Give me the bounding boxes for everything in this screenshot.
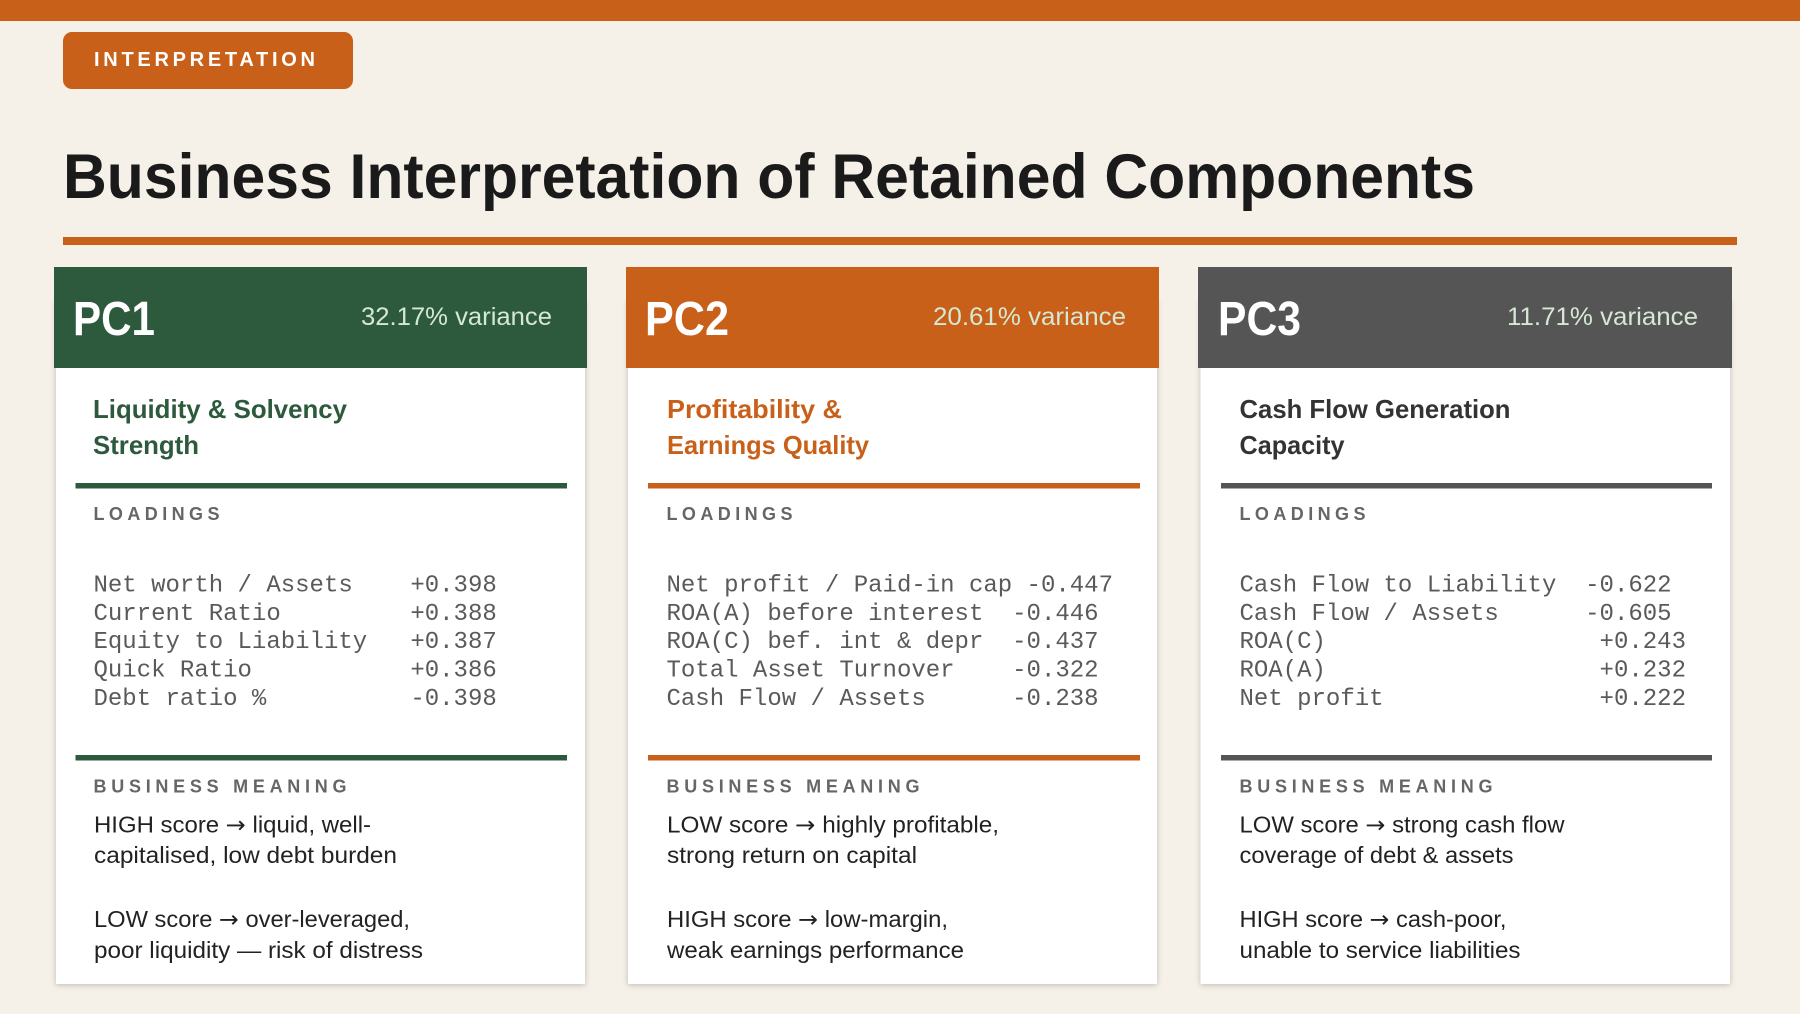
component name — [667, 394, 870, 460]
component name — [93, 394, 348, 460]
business meaning label: BUSINESS MEANING — [1240, 776, 1492, 796]
business meaning label: BUSINESS MEANING — [94, 776, 346, 796]
loadings table: Current Ratio +0.388 — [94, 601, 497, 628]
business meaning text: weak earnings performance — [666, 937, 964, 963]
card header: 20.61% variance — [933, 303, 1126, 331]
card header — [54, 267, 587, 368]
card header: PC3 — [1218, 293, 1301, 346]
loadings table: Net profit / Paid-in cap -0.447 — [666, 572, 1113, 600]
card body — [1200, 300, 1730, 984]
component name — [1240, 394, 1510, 460]
card header: 11.71% variance — [1507, 303, 1698, 331]
loadings table: Equity to Liability +0.387 — [94, 629, 497, 656]
loadings table: ROA(C) bef. int & depr -0.437 — [666, 629, 1099, 656]
loadings table: Total Asset Turnover -0.322 — [666, 658, 1099, 684]
business meaning text: capitalised, low debt burden — [94, 842, 397, 868]
business meaning text: LOW score → highly profitable, — [667, 812, 999, 838]
component name: Cash Flow Generation — [1240, 394, 1510, 424]
loadings table: Cash Flow to Liability -0.622 — [1240, 572, 1672, 600]
business meaning label: BUSINESS MEANING — [666, 776, 920, 796]
panel: PC2 — [626, 267, 1159, 984]
component name: Profitability & — [667, 394, 842, 424]
business meaning text: LOW score → over-leveraged, — [94, 906, 410, 933]
business meaning text — [666, 812, 999, 963]
card header: PC1 — [73, 293, 155, 346]
loadings table: Debt ratio % -0.398 — [94, 686, 497, 713]
loadings table: Net profit +0.222 — [1240, 686, 1686, 713]
loadings table: ROA(A) +0.232 — [1240, 658, 1686, 684]
business meaning text — [1240, 812, 1565, 963]
card header — [1198, 267, 1732, 368]
loadings table: ROA(C) +0.243 — [1240, 629, 1686, 656]
loadings table: Net worth / Assets +0.398 — [94, 572, 497, 600]
business meaning text: strong return on capital — [667, 842, 917, 868]
title rule — [63, 237, 1737, 245]
title: Business Interpretation of Retained Components — [63, 142, 1475, 212]
loadings table — [1240, 572, 1686, 713]
component name: Capacity — [1240, 430, 1345, 460]
component name: Earnings Quality — [667, 430, 870, 460]
business meaning text — [94, 812, 423, 963]
business meaning text: LOW score → strong cash flow — [1240, 812, 1565, 838]
card header — [626, 267, 1159, 368]
badge: interpretation: INTERPRETATION — [94, 49, 315, 71]
loadings table — [94, 572, 497, 713]
card body — [628, 300, 1157, 984]
business meaning text: HIGH score → liquid, well- — [94, 812, 371, 838]
loadings table: ROA(A) before interest -0.446 — [666, 601, 1099, 628]
card header: PC2 — [645, 293, 729, 346]
loadings table — [666, 572, 1113, 713]
business meaning text: HIGH score → low-margin, — [667, 906, 948, 933]
badge: interpretation — [63, 32, 353, 89]
business meaning text: poor liquidity — risk of distress — [94, 937, 423, 963]
loadings label: LOADINGS — [94, 504, 220, 524]
component name: Strength — [93, 430, 199, 460]
panel: PC3 — [1198, 267, 1732, 984]
business meaning text: coverage of debt & assets — [1240, 842, 1514, 868]
loadings table: Cash Flow / Assets -0.605 — [1240, 601, 1672, 628]
component name: Liquidity & Solvency — [93, 394, 348, 424]
loadings table: Quick Ratio +0.386 — [94, 658, 497, 684]
panel: PC1 — [54, 267, 587, 984]
card body — [56, 300, 585, 984]
top accent bar — [0, 0, 1800, 21]
loadings table: Cash Flow / Assets -0.238 — [666, 686, 1099, 713]
loadings label: LOADINGS — [1240, 504, 1366, 524]
business meaning text: unable to service liabilities — [1240, 937, 1520, 963]
loadings label: LOADINGS — [666, 504, 792, 524]
card header: 32.17% variance — [361, 303, 552, 331]
business meaning text: HIGH score → cash-poor, — [1240, 906, 1506, 933]
